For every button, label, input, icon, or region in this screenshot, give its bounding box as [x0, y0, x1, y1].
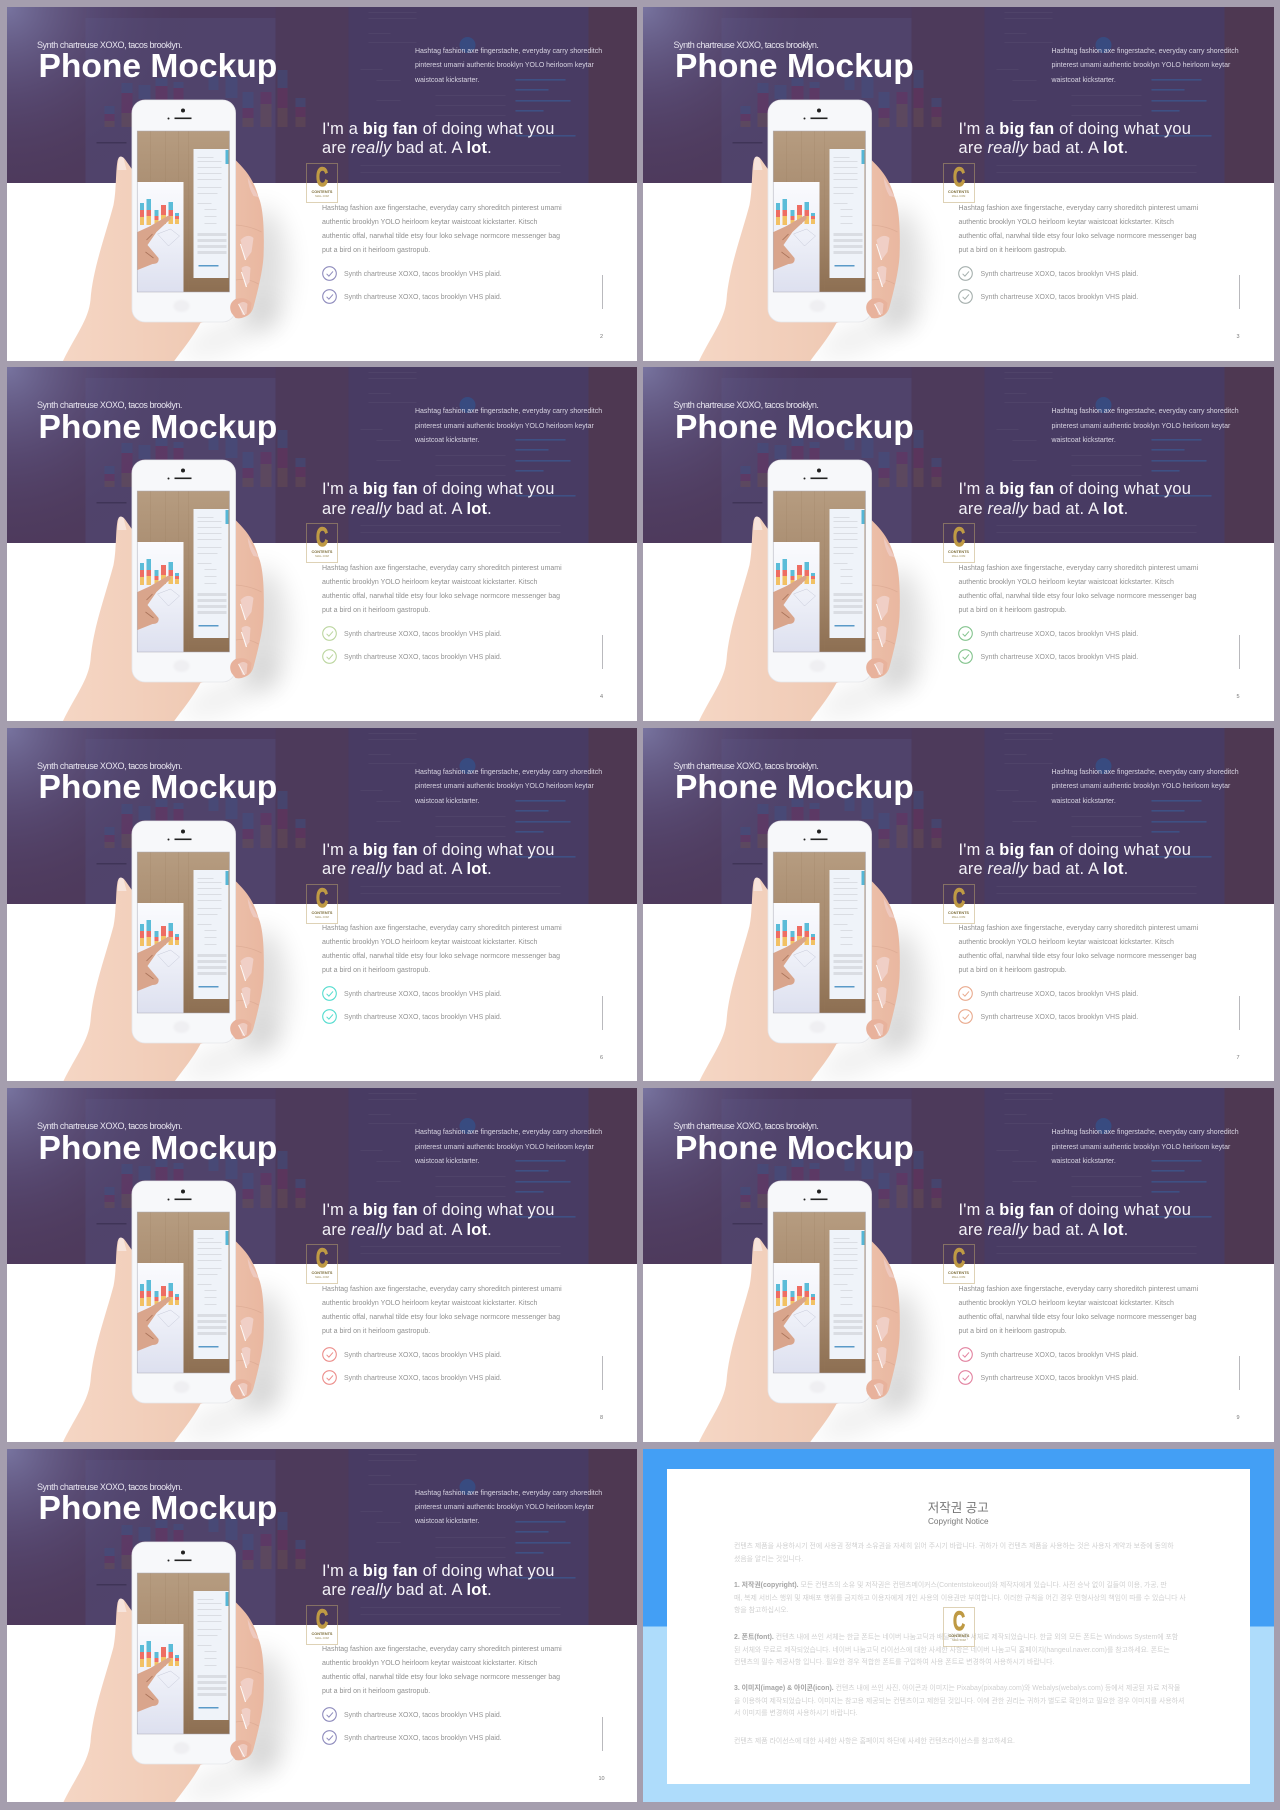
body text [958, 204, 1198, 254]
notice title: 저작권 공고 [928, 1501, 989, 1515]
body text: authentic offal, narwhal tilde etsy four loko selvage normcore messenger bag [322, 1674, 560, 1681]
subtitle: Synth chartreuse XOXO, tacos brooklyn. [37, 400, 182, 410]
icon: check 2 [958, 649, 973, 664]
logo: MALL.COM [315, 916, 329, 919]
background photo with bar chart [6, 1449, 637, 1802]
icon: hand holding phone [643, 1088, 1274, 1442]
logo: CONTENTS [948, 1271, 969, 1275]
check item 1: Synth chartreuse XOXO, tacos brooklyn VHS plaid. [344, 1712, 502, 1719]
intro text: waistcoat kickstarter. [415, 77, 479, 84]
icon: check 1 [958, 1347, 973, 1362]
body text: Hashtag fashion axe fingerstache, everyday carry shoreditch pinterest umami [958, 1286, 1198, 1293]
panel: copyright notice slide [643, 1449, 1274, 1802]
subtitle: Synth chartreuse XOXO, tacos brooklyn. [674, 40, 818, 50]
headline: are really bad at. A lot. [958, 860, 1128, 878]
logo [942, 163, 974, 203]
intro text: Hashtag fashion axe fingerstache, everyday carry shoreditch [1052, 1129, 1239, 1136]
notice image and icon paragraph [734, 1683, 1184, 1721]
intro text: waistcoat kickstarter. [1052, 77, 1116, 84]
intro text: pinterest umami authentic brooklyn YOLO heirloom keytar [1052, 423, 1230, 430]
panel: slide 3 [643, 7, 1274, 360]
check item 1: Synth chartreuse XOXO, tacos brooklyn VHS plaid. [344, 270, 502, 278]
body text [958, 924, 1198, 974]
background photo with bar chart [643, 728, 1274, 904]
notice intro paragraph [734, 1541, 1174, 1566]
icon: check 1 [322, 266, 337, 281]
headline: I'm a big fan of doing what you [958, 120, 1191, 138]
intro text: pinterest umami authentic brooklyn YOLO heirloom keytar [415, 1144, 594, 1151]
panel: slide 2 [6, 7, 637, 360]
intro text [415, 408, 602, 444]
logo: MALL.COM [315, 1637, 329, 1640]
icon: check 2 [958, 1370, 973, 1385]
body text: Hashtag fashion axe fingerstache, everyday carry shoreditch pinterest umami [322, 1286, 562, 1293]
panel: slide 10 [6, 1449, 637, 1802]
intro text: waistcoat kickstarter. [415, 1518, 479, 1525]
headline: I'm a big fan of doing what you [322, 480, 555, 498]
headline: I'm a big fan of doing what you [322, 1201, 555, 1219]
body text: Hashtag fashion axe fingerstache, everyday carry shoreditch pinterest umami [322, 204, 562, 212]
subtitle: Synth chartreuse XOXO, tacos brooklyn. [674, 761, 818, 771]
icon: check 1 [322, 1707, 336, 1722]
body text: authentic offal, narwhal tilde etsy four loko selvage normcore messenger bag [958, 953, 1197, 960]
logo: MALL.COM [952, 1639, 966, 1642]
intro text: pinterest umami authentic brooklyn YOLO heirloom keytar [1052, 783, 1230, 790]
body text: put a bird on it heirloom gastropub. [322, 246, 430, 254]
logo [943, 1607, 975, 1647]
headline: I'm a big fan of doing what you [322, 120, 555, 138]
body text: authentic brooklyn YOLO heirloom keytar waistcoat kickstarter. Kitsch [958, 218, 1174, 226]
headline [958, 120, 1191, 157]
check item 1: Synth chartreuse XOXO, tacos brooklyn VHS plaid. [980, 631, 1138, 638]
body text: put a bird on it heirloom gastropub. [958, 1328, 1067, 1335]
icon: check 2 [322, 1730, 336, 1745]
subtitle: Synth chartreuse XOXO, tacos brooklyn. [37, 761, 182, 771]
intro text: waistcoat kickstarter. [415, 437, 479, 444]
logo [942, 523, 974, 563]
intro text [1052, 768, 1239, 805]
title: Phone Mockup [675, 409, 914, 446]
icon: check 1 [322, 1347, 336, 1362]
notice image and icon paragraph: 3. 이미지(image) & 아이콘(icon). 컨텐츠 내에 쓰인 사진, 아이콘과 이미지는 Pixabay(pixabay.com)와 Webalys(webalys.com) 등에서 제공된 자료 저작물 [734, 1685, 1180, 1692]
subtitle: Synth chartreuse XOXO, tacos brooklyn. [37, 40, 182, 50]
logo: CONTENTS [312, 1271, 332, 1275]
intro text: pinterest umami authentic brooklyn YOLO heirloom keytar [1052, 62, 1230, 69]
check item 1: Synth chartreuse XOXO, tacos brooklyn VHS plaid. [980, 1352, 1138, 1359]
intro text: pinterest umami authentic brooklyn YOLO heirloom keytar [415, 783, 594, 790]
check item 2: Synth chartreuse XOXO, tacos brooklyn VHS plaid. [344, 654, 502, 661]
logo [306, 1244, 338, 1284]
background photo with bar chart [643, 7, 1274, 183]
logo: MALL.COM [315, 555, 329, 558]
body text [322, 564, 562, 614]
panel: slide 5 [643, 367, 1274, 721]
notice image and icon paragraph: 을 이용하여 제작되었습니다. 이미지는 참고용 제공되는 컨텐츠이고 제한된 것입니다. 이에 관한 권리는 귀하가 별도로 확인하고 필요한 경우 이미지를 사용하셔 [734, 1698, 1184, 1704]
panel: slide 6 [6, 728, 637, 1081]
logo: CONTENTS [312, 190, 332, 194]
intro text: waistcoat kickstarter. [1052, 1158, 1116, 1165]
notice closing line: 컨텐츠 제품 라이선스에 대한 사세한 사항은 홈페이지 하단에 사세한 컨텐츠라이선스를 참고하세요. [734, 1738, 1015, 1745]
title: Phone Mockup [38, 1130, 277, 1167]
body text: put a bird on it heirloom gastropub. [958, 967, 1067, 974]
panel: slide 9 [643, 1088, 1274, 1442]
intro text: Hashtag fashion axe fingerstache, everyday carry shoreditch [415, 769, 602, 776]
body text: authentic brooklyn YOLO heirloom keytar waistcoat kickstarter. Kitsch [958, 1300, 1174, 1307]
check item 1: Synth chartreuse XOXO, tacos brooklyn VHS plaid. [344, 991, 502, 998]
title: Phone Mockup [38, 48, 277, 85]
notice font paragraph: 컨텐츠의 필수 제공사항 입니다. 필요한 경우 적합한 폰트를 구입하여 사용 폰트로 변경하여 사용하시기 바랍니다. [734, 1659, 1054, 1666]
page number: 3 [1236, 334, 1240, 340]
logo: MALL.COM [315, 1276, 329, 1279]
icon: hand holding phone [699, 100, 930, 361]
check item 1: Synth chartreuse XOXO, tacos brooklyn VHS plaid. [344, 631, 502, 638]
check item 1: Synth chartreuse XOXO, tacos brooklyn VHS plaid. [980, 270, 1138, 278]
body text: put a bird on it heirloom gastropub. [322, 1688, 430, 1695]
body text: authentic brooklyn YOLO heirloom keytar waistcoat kickstarter. Kitsch [322, 218, 537, 226]
body text: authentic brooklyn YOLO heirloom keytar waistcoat kickstarter. Kitsch [958, 939, 1174, 946]
body text: Hashtag fashion axe fingerstache, everyday carry shoreditch pinterest umami [322, 565, 562, 572]
title: Phone Mockup [38, 1490, 277, 1527]
headline: I'm a big fan of doing what you [958, 1201, 1191, 1219]
page number: 8 [600, 1415, 603, 1421]
body text: authentic offal, narwhal tilde etsy four loko selvage normcore messenger bag [958, 1314, 1197, 1321]
body text: authentic offal, narwhal tilde etsy four loko selvage normcore messenger bag [322, 593, 560, 600]
icon: hand holding phone [700, 820, 930, 1081]
logo [306, 523, 338, 563]
icon: hand holding phone [699, 460, 930, 721]
logo [942, 884, 974, 924]
check item 2: Synth chartreuse XOXO, tacos brooklyn VHS plaid. [344, 294, 502, 300]
headline [958, 841, 1191, 878]
body text [322, 204, 562, 254]
intro text: pinterest umami authentic brooklyn YOLO heirloom keytar [1052, 1144, 1230, 1151]
notice copyright paragraph: 매, 복제 서비스 행위 및 재배포 행위를 금지하고 이용자에게 개인 사용의 이용권만 부여합니다. 이러한 규칙을 어긴 경우 민형사상의 책임이 따를 수 있습니다 사 [734, 1594, 1186, 1602]
notice intro paragraph: 셨음을 알리는 것입니다. [734, 1556, 803, 1562]
headline: are really bad at. A lot. [322, 139, 492, 157]
notice copyright paragraph: 1. 저작권(copyright). 모든 컨텐츠의 소유 및 저작권은 컨텐츠메이커스(Contentstokeout)와 제작자에게 있습니다. 사전 승낙 없이 길들여 이용, 가공, 판 [734, 1582, 1167, 1589]
logo [306, 1605, 338, 1645]
intro text: waistcoat kickstarter. [415, 1158, 479, 1165]
body text: Hashtag fashion axe fingerstache, everyday carry shoreditch pinterest umami [958, 925, 1198, 932]
intro text: Hashtag fashion axe fingerstache, everyday carry shoreditch [415, 1490, 602, 1497]
page number: 7 [1236, 1055, 1240, 1061]
body text: authentic offal, narwhal tilde etsy four loko selvage normcore messenger bag [958, 232, 1197, 240]
body text: put a bird on it heirloom gastropub. [322, 967, 430, 974]
subtitle: Synth chartreuse XOXO, tacos brooklyn. [37, 1482, 182, 1492]
body text [322, 924, 562, 974]
intro text: Hashtag fashion axe fingerstache, everyday carry shoreditch [415, 1129, 602, 1136]
page number: 5 [1236, 694, 1240, 700]
page number: 10 [598, 1776, 605, 1782]
body text: authentic brooklyn YOLO heirloom keytar waistcoat kickstarter. Kitsch [958, 579, 1174, 586]
logo: MALL.COM [952, 555, 965, 558]
logo: CONTENTS [312, 911, 332, 915]
background photo with bar chart [643, 367, 1274, 543]
background photo with bar chart [643, 1088, 1274, 1442]
intro text [1052, 48, 1239, 84]
panel: slide 4 [6, 367, 637, 721]
logo: CONTENTS [312, 550, 332, 554]
page number: 4 [600, 694, 603, 700]
intro text [415, 1487, 602, 1530]
logo: CONTENTS [948, 550, 969, 554]
icon: check 1 [958, 986, 973, 1001]
body text: authentic brooklyn YOLO heirloom keytar waistcoat kickstarter. Kitsch [322, 939, 537, 946]
body text: Hashtag fashion axe fingerstache, everyday carry shoreditch pinterest umami [322, 925, 562, 932]
headline [322, 841, 555, 878]
icon: hand holding phone [6, 1088, 637, 1442]
body text: authentic offal, narwhal tilde etsy four loko selvage normcore messenger bag [322, 232, 560, 240]
icon: check 1 [958, 626, 973, 641]
headline: are really bad at. A lot. [958, 1221, 1128, 1239]
notice copyright paragraph [734, 1580, 1186, 1618]
intro text [1052, 1126, 1239, 1169]
body text: authentic offal, narwhal tilde etsy four loko selvage normcore messenger bag [322, 1314, 560, 1321]
title: Phone Mockup [675, 1130, 914, 1167]
subtitle: Synth chartreuse XOXO, tacos brooklyn. [674, 400, 818, 410]
intro text: Hashtag fashion axe fingerstache, everyday carry shoreditch [1052, 48, 1239, 55]
title: Phone Mockup [38, 769, 277, 806]
logo: MALL.COM [952, 1276, 965, 1279]
icon: hand holding phone [64, 820, 294, 1081]
notice font paragraph: 된 서체와 무료로 제작되었습니다. 네이버 나눔고딕 라이선스에 대한 사세한 사항은 네이버 나눔고딕 홈페이지(hangeul.naver.com)를 참고하세요. 폰트는 [734, 1646, 1170, 1654]
headline: are really bad at. A lot. [322, 1221, 492, 1239]
logo [306, 163, 338, 203]
body text: put a bird on it heirloom gastropub. [958, 246, 1067, 254]
body text: authentic offal, narwhal tilde etsy four loko selvage normcore messenger bag [322, 953, 560, 960]
logo: CONTENTS [948, 190, 969, 194]
intro text: waistcoat kickstarter. [415, 798, 479, 805]
body text: Hashtag fashion axe fingerstache, everyday carry shoreditch pinterest umami [958, 204, 1198, 212]
page number: 9 [1236, 1415, 1240, 1421]
body text [958, 564, 1198, 614]
body text: authentic brooklyn YOLO heirloom keytar waistcoat kickstarter. Kitsch [322, 1300, 537, 1307]
headline [322, 1201, 555, 1240]
check item 2: Synth chartreuse XOXO, tacos brooklyn VHS plaid. [344, 1735, 502, 1742]
intro text: Hashtag fashion axe fingerstache, everyday carry shoreditch [1052, 769, 1239, 776]
headline: I'm a big fan of doing what you [322, 1562, 555, 1580]
intro text: waistcoat kickstarter. [1052, 437, 1116, 444]
check item 2: Synth chartreuse XOXO, tacos brooklyn VHS plaid. [980, 1014, 1138, 1021]
icon: hand holding phone [63, 460, 294, 721]
headline: are really bad at. A lot. [322, 500, 492, 518]
body text: authentic brooklyn YOLO heirloom keytar waistcoat kickstarter. Kitsch [322, 579, 537, 586]
background photo with bar chart [7, 728, 637, 904]
panel: slide 8 [6, 1088, 637, 1442]
check item 2: Synth chartreuse XOXO, tacos brooklyn VHS plaid. [344, 1375, 502, 1382]
intro text: Hashtag fashion axe fingerstache, everyday carry shoreditch [1052, 408, 1239, 415]
intro text: pinterest umami authentic brooklyn YOLO heirloom keytar [415, 1504, 594, 1511]
check item 2: Synth chartreuse XOXO, tacos brooklyn VHS plaid. [980, 294, 1138, 300]
intro text [415, 768, 602, 805]
headline: are really bad at. A lot. [958, 139, 1128, 157]
icon: check 1 [322, 626, 337, 641]
logo: CONTENTS [948, 911, 969, 915]
check item 2: Synth chartreuse XOXO, tacos brooklyn VHS plaid. [344, 1014, 502, 1021]
icon: check 2 [322, 1009, 337, 1024]
notice font paragraph [734, 1632, 1178, 1670]
panel: notice card [666, 1469, 1250, 1784]
headline [322, 120, 555, 157]
subtitle: Synth chartreuse XOXO, tacos brooklyn. [674, 1121, 818, 1131]
background photo with bar chart [6, 1088, 637, 1442]
check item 2: Synth chartreuse XOXO, tacos brooklyn VHS plaid. [980, 1375, 1138, 1382]
icon: check 1 [322, 986, 337, 1001]
icon: check 2 [322, 649, 337, 664]
intro text [415, 48, 602, 84]
title: Phone Mockup [38, 409, 277, 446]
body text: Hashtag fashion axe fingerstache, everyday carry shoreditch pinterest umami [322, 1646, 562, 1653]
notice copyright paragraph: 항을 참고하십시오. [734, 1607, 789, 1614]
check item 1: Synth chartreuse XOXO, tacos brooklyn VHS plaid. [344, 1352, 502, 1359]
icon: check 2 [322, 1370, 336, 1385]
intro text: Hashtag fashion axe fingerstache, everyday carry shoreditch [415, 408, 602, 415]
headline: I'm a big fan of doing what you [322, 841, 555, 859]
icon: check 2 [958, 289, 973, 304]
title: Phone Mockup [675, 48, 914, 85]
headline [322, 480, 555, 518]
intro text: pinterest umami authentic brooklyn YOLO heirloom keytar [415, 62, 594, 69]
headline [958, 1201, 1191, 1240]
body text [322, 1643, 562, 1699]
background photo with bar chart [7, 367, 637, 543]
headline: are really bad at. A lot. [322, 860, 492, 878]
subtitle: Synth chartreuse XOXO, tacos brooklyn. [37, 1121, 182, 1131]
body text [958, 1283, 1198, 1339]
headline [322, 1562, 555, 1600]
intro text: waistcoat kickstarter. [1052, 798, 1116, 805]
check item 2: Synth chartreuse XOXO, tacos brooklyn VHS plaid. [980, 654, 1138, 661]
headline: I'm a big fan of doing what you [958, 480, 1191, 498]
logo: MALL.COM [952, 916, 965, 919]
notice intro paragraph: 컨텐츠 제품을 사용하시기 전에 사용권 정책과 소유권을 자세히 읽어 주시기 바랍니다. 귀하가 이 컨텐츠 제품을 사용하는 것은 사용자 계약과 보증에 동의하 [734, 1543, 1174, 1550]
logo [942, 1244, 974, 1284]
body text: authentic brooklyn YOLO heirloom keytar waistcoat kickstarter. Kitsch [322, 1660, 537, 1667]
logo: CONTENTS [312, 1632, 332, 1636]
body text: Hashtag fashion axe fingerstache, everyday carry shoreditch pinterest umami [958, 565, 1198, 572]
icon: hand holding phone [63, 100, 294, 361]
title: Phone Mockup [675, 769, 914, 806]
logo: CONTENTS [949, 1634, 969, 1638]
page number: 2 [600, 334, 603, 340]
headline: are really bad at. A lot. [322, 1581, 492, 1599]
logo [306, 884, 338, 924]
intro text [415, 1126, 602, 1169]
notice subtitle: Copyright Notice [928, 1517, 989, 1526]
headline: are really bad at. A lot. [958, 500, 1128, 518]
body text: put a bird on it heirloom gastropub. [322, 1328, 430, 1335]
icon: hand holding phone [6, 1449, 637, 1802]
body text [322, 1283, 562, 1339]
body text: authentic offal, narwhal tilde etsy four loko selvage normcore messenger bag [958, 593, 1197, 600]
headline: I'm a big fan of doing what you [958, 841, 1191, 859]
icon: check 2 [958, 1009, 973, 1024]
headline [958, 480, 1191, 518]
page number: 6 [600, 1055, 603, 1061]
body text: put a bird on it heirloom gastropub. [958, 607, 1067, 614]
check item 1: Synth chartreuse XOXO, tacos brooklyn VHS plaid. [980, 991, 1138, 998]
notice font paragraph: 2. 폰트(font). 컨텐츠 내에 쓰인 서체는 한글 폰트는 네이버 나눔고딕과 배달의민족 서체로 제작되었습니다. 한글 외의 모든 폰트는 Windows System에 포함 [734, 1634, 1178, 1641]
body text: put a bird on it heirloom gastropub. [322, 607, 430, 614]
notice image and icon paragraph: 서 이미지를 변경하여 사용하시기 바랍니다. [734, 1710, 858, 1717]
logo: MALL.COM [952, 195, 965, 198]
intro text: Hashtag fashion axe fingerstache, everyday carry shoreditch [415, 48, 602, 55]
panel: slide 7 [643, 728, 1274, 1081]
icon: check 2 [322, 289, 337, 304]
intro text: pinterest umami authentic brooklyn YOLO heirloom keytar [415, 423, 594, 430]
intro text [1052, 408, 1239, 444]
icon: check 1 [958, 266, 973, 281]
logo: MALL.COM [315, 195, 329, 198]
background photo with bar chart [7, 7, 637, 183]
